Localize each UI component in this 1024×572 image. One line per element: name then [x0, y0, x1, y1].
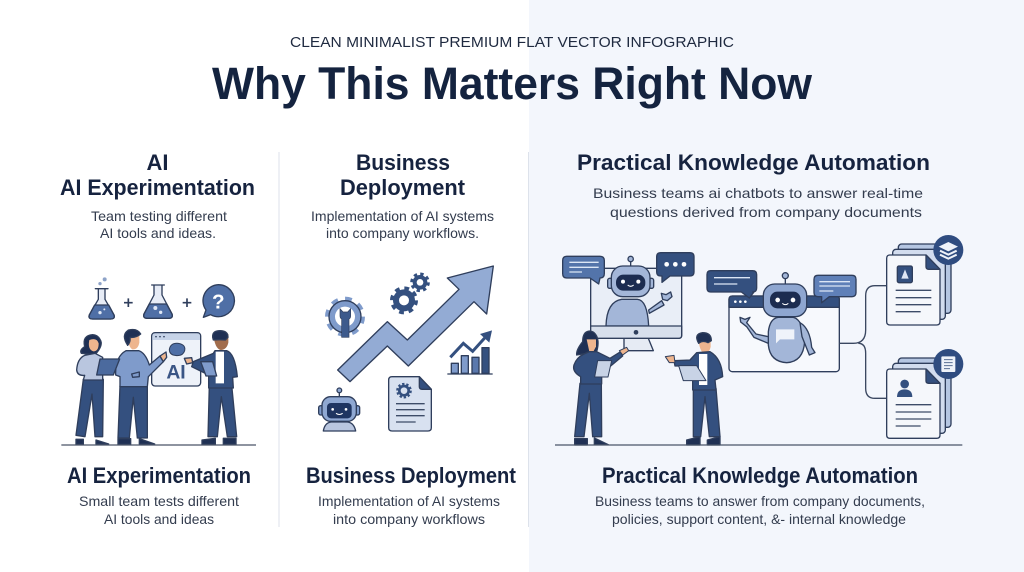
text block: business deployment intro: Implementation of AI systems	[311, 208, 494, 224]
heading: AI experimentation: AI Experimentation	[67, 463, 251, 488]
text block: AI experimentation summary: Small team tests different	[79, 493, 239, 509]
figure: woman with laptop	[76, 335, 120, 444]
icon: plus	[124, 298, 133, 307]
icon: document stack 1	[887, 235, 963, 325]
heading: practical knowledge automation: Practical Knowledge Automation	[577, 150, 930, 175]
text block: practical knowledge summary: Business teams to answer from company documents,	[595, 493, 925, 509]
ground line	[555, 443, 962, 447]
text block: business deployment intro	[311, 208, 494, 241]
title: Why This Matters Right Now	[212, 58, 813, 109]
figure: woman with tablet	[574, 331, 629, 445]
icon: robot	[319, 388, 360, 431]
icon: dark gear	[392, 288, 416, 312]
panel: AI experimentation heading: AI	[146, 150, 168, 175]
heading: business deployment: Business Deployment	[306, 463, 517, 488]
illustration: deployment growth	[319, 266, 493, 431]
icon: wrench gear	[327, 299, 363, 337]
text block: practical knowledge intro	[593, 185, 923, 220]
panel: business deployment heading: Deployment	[340, 175, 466, 200]
illustration: knowledge chatbots	[555, 235, 963, 445]
text block: practical knowledge summary	[595, 493, 925, 527]
text block: practical knowledge intro: Business teams ai chatbots to answer real-time	[593, 185, 923, 201]
icon: blue speech bubble	[814, 275, 856, 303]
arrow: growth	[338, 266, 493, 382]
text block: business deployment summary: Implementation of AI systems	[318, 493, 500, 509]
icon: tall flask	[89, 277, 114, 319]
figure: man in jacket	[184, 331, 237, 444]
text block: AI experimentation intro: AI tools and ideas.	[100, 225, 216, 241]
panel: AI experimentation heading: AI Experimentation	[60, 175, 255, 200]
text block: AI experimentation summary: AI tools and ideas	[104, 511, 214, 527]
text block: business deployment intro: into company workflows.	[326, 225, 479, 241]
text block: AI experimentation intro	[91, 208, 227, 241]
panel: business deployment heading: Business	[356, 150, 450, 175]
connector lines	[839, 286, 887, 398]
text block: AI experimentation intro: Team testing different	[91, 208, 227, 224]
text block: business deployment summary	[318, 493, 500, 527]
text block: practical knowledge summary: policies, support content, &- internal knowledge	[612, 511, 906, 527]
icon: question bubble	[203, 285, 234, 317]
figure: man in sweater	[116, 329, 167, 444]
panel: business deployment heading	[340, 150, 466, 200]
icon: browser window with robot	[729, 273, 839, 372]
icon: AI screen	[152, 333, 201, 386]
illustration: team testing AI	[61, 277, 256, 445]
icon: dark speech bubble	[707, 271, 757, 298]
ground line	[61, 443, 256, 447]
icon: document with gear	[389, 377, 431, 431]
text block: practical knowledge intro: questions derived from company documents	[610, 204, 922, 220]
heading: practical knowledge automation: Practical Knowledge Automation	[602, 463, 918, 488]
icon: monitor with robot	[591, 256, 682, 351]
icon: typing bubble	[657, 253, 694, 282]
icon: plus	[183, 298, 191, 307]
icon: AI screen: AI	[166, 362, 186, 383]
chart: small bar chart	[447, 330, 493, 374]
icon: small gear	[412, 274, 428, 291]
text block: business deployment summary: into company workflows	[333, 511, 485, 527]
icon: round flask	[144, 285, 172, 318]
text block: AI experimentation summary	[79, 493, 239, 527]
icon: document stack 2	[887, 349, 963, 438]
panel: AI experimentation heading	[60, 150, 255, 200]
icon: question bubble: ?	[212, 291, 225, 314]
icon: speech bubble	[563, 256, 604, 284]
eyebrow heading: CLEAN MINIMALIST PREMIUM FLAT VECTOR INFOGRAPHIC	[290, 34, 734, 51]
figure: man with laptop	[665, 333, 723, 445]
